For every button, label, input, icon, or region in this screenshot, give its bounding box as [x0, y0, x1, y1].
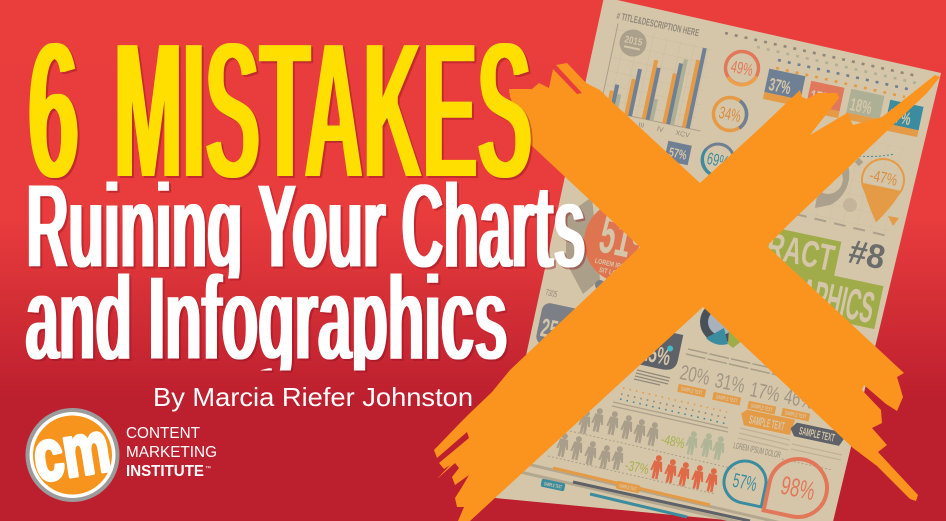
orange sample tag: [739, 409, 795, 435]
people row 2 red: [649, 454, 720, 493]
small triangle marker: [888, 216, 899, 226]
stat 31%: [711, 369, 747, 406]
coral 51% badge: [545, 197, 666, 299]
year badge: [617, 27, 649, 59]
ring 34%: [710, 94, 750, 134]
people row 1 green: [684, 430, 727, 461]
logo wordmark: ™: [205, 465, 211, 472]
people row 2 grey: [555, 432, 626, 471]
lorem text lines: [686, 349, 790, 378]
stat 20%: SAMPLE TEXT: [680, 386, 703, 397]
stat block 18%: 18%: [848, 94, 874, 118]
stat block 57% teal: 57%: [887, 105, 913, 129]
stat 20%: [676, 361, 712, 398]
stat block 57% teal: [884, 100, 924, 137]
logo badge: cm: [28, 407, 115, 497]
small stat card 57%: 57%: [668, 144, 689, 163]
title: 6 MISTAKES: 6: [28, 0, 79, 222]
stat 46%: [780, 385, 816, 422]
callout 98%: 98%: [778, 470, 818, 506]
lorem heading: LOREM IPSUM DOLOR: [733, 440, 782, 460]
ring 49%: 49%: [729, 57, 755, 80]
ring 69%: [699, 141, 737, 179]
stat block 17%: 17%: [808, 86, 834, 110]
grey card 25%: 25%: [538, 312, 574, 348]
stat block 18%: [845, 89, 885, 126]
stat 17%: SAMPLE TEXT: [750, 403, 773, 414]
stat block 37%: [763, 69, 805, 107]
faint grid with trend line: [801, 130, 908, 237]
stat 20%: 20%: [678, 361, 712, 390]
green banner top: [759, 224, 842, 280]
dark card 25%: 25%: [638, 339, 673, 371]
green banner bottom: [760, 262, 883, 334]
grey card 25%: [535, 302, 583, 351]
grey sample tag: [789, 422, 845, 446]
callout 57%: 57%: [731, 470, 759, 496]
byline: By Marcia Riefer Johnston: [153, 382, 473, 412]
bar chart: XCV: [675, 130, 691, 140]
logo wordmark: CONTENT: [126, 425, 200, 442]
coral 51% badge: SIT LOREM: [598, 267, 629, 280]
orange tag: [615, 481, 641, 493]
dark card 25%: [630, 325, 683, 373]
dotted timeline: [620, 388, 727, 424]
stat 31%: SAMPLE TEXT: [715, 394, 738, 405]
stat 31%: 31%: [713, 369, 747, 398]
coral 51% badge: 7305: [545, 287, 558, 299]
orange tag: SAMPLE TEXT: [618, 483, 637, 493]
pin 47%: [854, 155, 908, 226]
people row 1 grey: [577, 407, 661, 447]
ring 69%: 69%: [705, 149, 731, 172]
stat 17%: [746, 378, 782, 415]
gauge shape: [815, 158, 863, 212]
coral 51% badge: LOREM IPSUM: [594, 258, 633, 273]
hash eight: #8: [845, 233, 888, 277]
pin 47%: -47%: [868, 167, 899, 190]
donut chart: [700, 301, 743, 348]
orange sample tag: SAMPLE TEXT: [748, 412, 786, 434]
orange brush X: [434, 63, 940, 521]
callout 98%: [764, 454, 832, 521]
stat block 37%: 37%: [767, 74, 793, 98]
logo wordmark: [126, 425, 217, 480]
coral 51% badge: 51%: [595, 204, 662, 274]
callout 57%: [720, 457, 770, 507]
title: 6 MISTAKES: [28, 0, 532, 222]
logo wordmark: INSTITUTE: [126, 463, 204, 480]
sheet title: # TITLE&DESCRIPTION HERE: [616, 11, 700, 39]
small stat card 57%: [664, 141, 692, 165]
stat 17%: 17%: [748, 378, 782, 407]
bar chart: [597, 23, 719, 142]
bar chart: IV: [656, 126, 664, 134]
label 37%: -37%: [624, 457, 650, 477]
sample text lines: [738, 428, 842, 460]
route lines: [795, 214, 892, 237]
infographic sheet: [495, 0, 941, 521]
paragraph block: [634, 370, 670, 385]
bar chart: III: [638, 122, 645, 130]
teal tag: SAMPLE TEXT: [543, 481, 562, 491]
logo wordmark: MARKETING: [126, 444, 217, 461]
stat block 17%: [805, 81, 845, 118]
label 48%: -48%: [660, 431, 686, 451]
teal tag: [540, 479, 566, 491]
stat 46%: SAMPLE TEXT: [784, 410, 807, 421]
dotted rows: [725, 33, 917, 97]
stat 46%: 46%: [782, 385, 816, 414]
bottom timeline bars: [520, 464, 790, 521]
ring 34%: 34%: [717, 103, 743, 126]
year badge: 2015: [623, 34, 644, 49]
ring 49%: [722, 48, 762, 88]
green banner top: RACT: [763, 225, 838, 279]
grey sample tag: SAMPLE TEXT: [798, 425, 836, 445]
